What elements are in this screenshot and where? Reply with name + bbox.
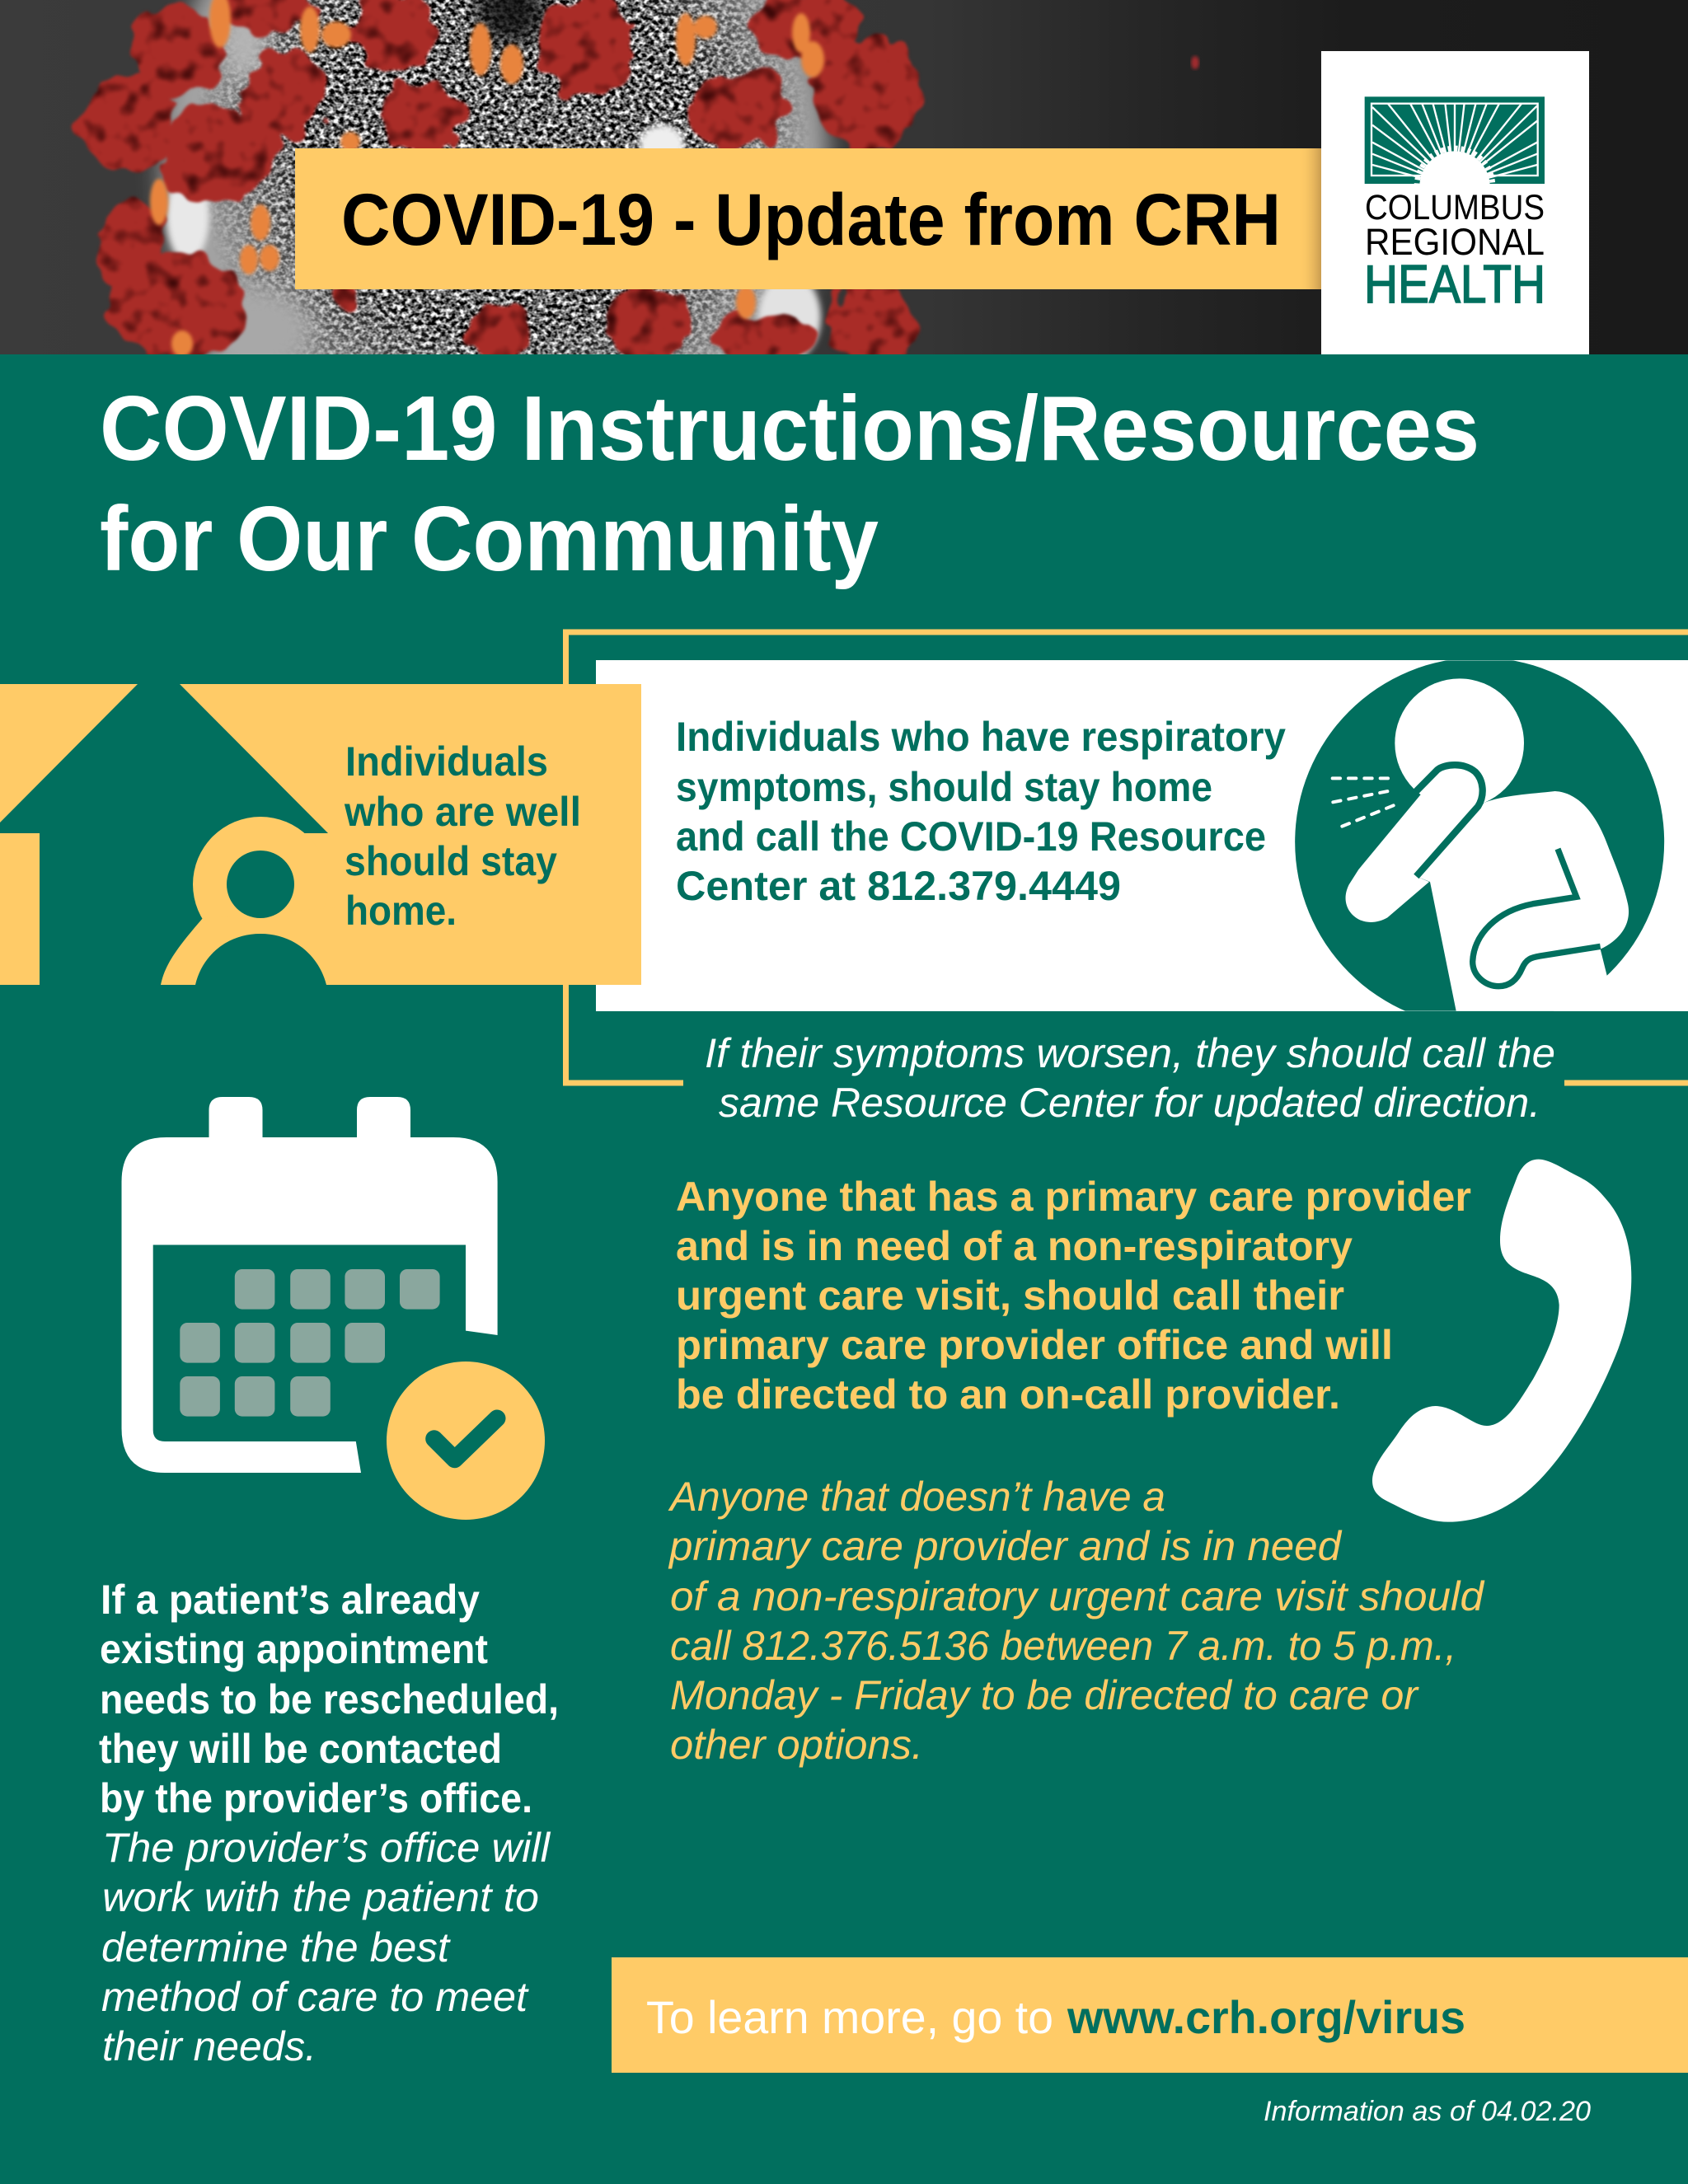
stay home text: should stay (345, 838, 557, 884)
logo wordmark (1364, 188, 1545, 314)
logo wordmark: REGIONAL (1365, 221, 1545, 263)
respiratory text: Individuals who have respiratory (676, 714, 1286, 760)
header photo: coronavirus (0, 0, 1688, 354)
no primary care provider text: Monday - Friday to be directed to care or (670, 1672, 1419, 1718)
symptoms worsen note: If their symptoms worsen, they should call the (705, 1030, 1555, 1076)
symptoms worsen note (705, 1030, 1555, 1126)
appointment text: existing appointment (100, 1626, 488, 1672)
no primary care provider text: primary care provider and is in need (668, 1523, 1343, 1569)
no primary care provider text: call 812.376.5136 between 7 a.m. to 5 p.m., (670, 1623, 1456, 1669)
title bar (295, 148, 1321, 289)
icon: telephone handset (1372, 1160, 1631, 1522)
respiratory text: symptoms, should stay home (676, 764, 1212, 810)
icon: person coughing into elbow (1295, 658, 1664, 1027)
logo wordmark: COLUMBUS (1365, 188, 1545, 227)
primary care provider text: and is in need of a non-respiratory (676, 1223, 1353, 1269)
appointment text: The provider’s office will (102, 1825, 551, 1871)
main heading (100, 377, 1479, 590)
stay home text: who are well (344, 789, 581, 835)
title bar text: COVID-19 - Update from CRH (341, 178, 1281, 260)
appointment text: If a patient’s already (101, 1577, 480, 1623)
stay home text (344, 738, 581, 934)
respiratory text: and call the COVID-19 Resource (676, 813, 1266, 860)
website link: www.crh.org/virus (1067, 1991, 1465, 2043)
no primary care provider text: of a non-respiratory urgent care visit should (670, 1573, 1485, 1619)
stay home text: Individuals (345, 738, 548, 785)
primary care provider text: primary care provider office and will (676, 1322, 1393, 1368)
no primary care provider text: other options. (670, 1722, 923, 1768)
call to action text: To learn more, go to (646, 1991, 1053, 2043)
logo panel: Columbus Regional Health (1321, 51, 1589, 354)
appointment text: they will be contacted (99, 1726, 502, 1772)
symptoms worsen note: same Resource Center for updated direction. (719, 1080, 1540, 1126)
appointment text: work with the patient to (102, 1874, 539, 1920)
call to action bar (612, 1957, 1688, 2073)
icon: person (161, 817, 346, 985)
no primary care provider text: Anyone that doesn’t have a (668, 1474, 1165, 1520)
appointment text (99, 1577, 559, 2069)
no primary care provider text (668, 1474, 1485, 1768)
appointment text: determine the best (101, 1924, 451, 1971)
icon: house (0, 684, 328, 985)
panel: respiratory symptoms (596, 658, 1688, 1027)
respiratory text: Center at 812.379.4449 (676, 863, 1121, 909)
primary care provider text: Anyone that has a primary care provider (676, 1174, 1471, 1220)
main heading: for Our Community (100, 488, 879, 590)
main heading: COVID-19 Instructions/Resources (100, 377, 1479, 480)
primary care provider text: be directed to an on-call provider. (676, 1371, 1340, 1418)
icon: calendar with check (122, 1097, 545, 1520)
stay home text: home. (345, 888, 457, 934)
primary care provider text (676, 1174, 1471, 1418)
appointment text: needs to be rescheduled, (100, 1676, 559, 1722)
respiratory text (676, 714, 1286, 909)
logo emblem: sunburst (1365, 96, 1545, 184)
appointment text: by the provider’s office. (100, 1775, 532, 1821)
appointment text: their needs. (102, 2023, 316, 2069)
yellow outline frame (565, 632, 1688, 1083)
primary care provider text: urgent care visit, should call their (676, 1272, 1344, 1319)
panel: stay home (0, 684, 641, 985)
date note: Information as of 04.02.20 (1264, 2096, 1591, 2127)
appointment text: method of care to meet (101, 1974, 529, 2020)
logo wordmark: HEALTH (1364, 254, 1545, 314)
